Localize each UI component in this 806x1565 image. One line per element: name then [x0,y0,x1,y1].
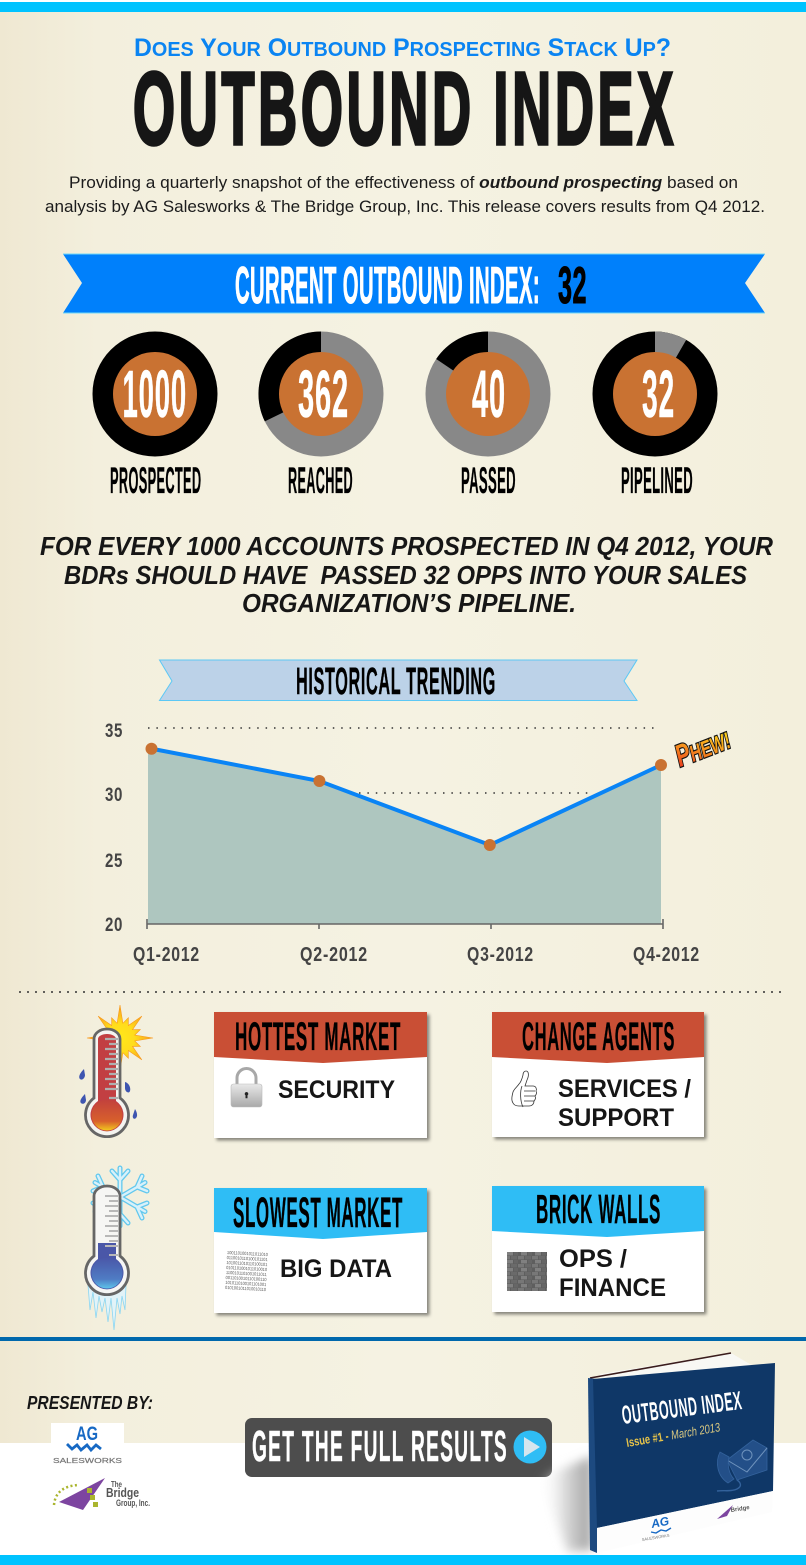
button: get the full results [245,1418,552,1477]
presented by label: PRESENTED BY: [27,1393,153,1413]
logo: the bridge group: Group, Inc. [116,1498,150,1508]
bottom bar [0,1555,806,1565]
logo: the bridge group [54,1478,150,1510]
donut: prospected [92,332,218,501]
card: hottest market: SECURITY [278,1076,395,1104]
banner: current outbound index [63,254,765,315]
chart axis [147,919,663,929]
chart y axis labels: 30 [105,784,123,806]
chart line [148,748,661,845]
chart area [148,748,661,924]
icon: play arrow [514,1430,546,1464]
card: brick walls [492,1186,704,1312]
book footer logos: AG [649,1514,670,1531]
icon: thumbs up [512,1071,536,1107]
logo: ag salesworks [51,1423,124,1465]
icon: padlock [231,1068,262,1107]
intro text: Providing a quarterly snapshot of the effectiveness of outbound prospecting based on [69,174,738,192]
book footer logos: Bridge [730,1505,751,1514]
donut: pipelined: 32 [642,357,675,432]
intro text: analysis by AG Salesworks & The Bridge Group, Inc. This release covers results from Q4 2012. [45,198,765,216]
chart data points [146,743,667,851]
banner: historical trending: HISTORICAL TRENDING [296,661,496,703]
footer divider [0,1337,806,1341]
donut: reached: 362 [298,357,349,432]
icon: binary data: 0101101001011010010 [226,1265,268,1272]
icon: binary data: 1100101101001011011 [226,1270,267,1277]
icon: binary data: 1010110100101101001 [225,1280,267,1287]
top bar [0,2,806,12]
donut: passed: PASSED [461,460,516,501]
donut: reached: REACHED [288,460,353,501]
card: change agents: SERVICES / [558,1075,691,1103]
logo: ag salesworks: SALESWORKS [53,1456,122,1465]
icon: binary data: 0011010010110100110 [226,1275,267,1282]
book footer logos [641,1505,751,1542]
icon: binary data: 0110010110100101101 [227,1255,268,1262]
chart y axis labels: 35 [105,720,123,742]
logo: the bridge group: The [111,1480,122,1489]
logo: the bridge group: Bridge [106,1485,139,1500]
donut: prospected: 1000 [122,357,187,432]
statement text: FOR EVERY 1000 ACCOUNTS PROSPECTED IN Q4 2012, YOUR [40,531,773,561]
statement text [40,531,773,618]
intro text [45,174,765,216]
card: slowest market [214,1188,427,1313]
text: HOTTEST MARKET [235,1015,401,1059]
icon: hot thermometer [79,1005,153,1137]
card: brick walls: OPS / [559,1245,627,1273]
donut: passed [426,332,550,501]
card: slowest market: BIG DATA [280,1255,392,1283]
chart y axis labels: 20 [105,914,123,936]
icon: binary data: 0101001011010010110 [225,1285,267,1292]
donut: reached [258,331,384,501]
text: SLOWEST MARKET [233,1189,403,1237]
icon: envelope and phone [717,1440,767,1491]
donut: passed: 40 [472,357,506,432]
chart y axis labels: 25 [105,850,123,872]
chart x axis labels: Q2-2012 [300,944,368,966]
chart x axis labels: Q3-2012 [467,944,534,966]
chart x axis labels [133,944,700,966]
card: change agents: SUPPORT [558,1104,674,1132]
book cover [540,1353,775,1553]
card: change agents [492,1012,704,1137]
donut: pipelined [592,332,718,501]
icon: phew burst: PHEW! [670,721,735,774]
chart y axis labels [105,720,123,936]
icon: binary data: 1010011010110100101 [226,1260,268,1267]
icon: brick wall [507,1252,547,1291]
icon: binary data [225,1250,268,1292]
line chart: historical trend [105,720,700,966]
chart x axis labels: Q4-2012 [633,944,700,966]
card: hottest market [214,1012,427,1138]
card: brick walls: FINANCE [559,1274,666,1302]
book footer logos: SALESWORKS [641,1533,670,1542]
book issue line: Issue #1 - March 2013 [625,1420,721,1450]
banner: historical trending [160,660,637,703]
statement text: BDRs SHOULD HAVE PASSED 32 OPPS INTO YOUR SALES [64,560,748,590]
icon: binary data: 1001101001011011010 [227,1250,268,1257]
icon: cold thermometer [86,1168,147,1330]
statement text: ORGANIZATION’S PIPELINE. [242,588,576,618]
subtitle: does your outbound prospecting stack up: DOES YOUR OUTBOUND PROSPECTING STACK UP? [134,34,671,62]
chart x axis labels: Q1-2012 [133,944,200,966]
logo: ag salesworks: AG [76,1424,98,1445]
text: PROSPECTED [110,460,202,501]
banner: current outbound index: 32 [558,257,587,315]
